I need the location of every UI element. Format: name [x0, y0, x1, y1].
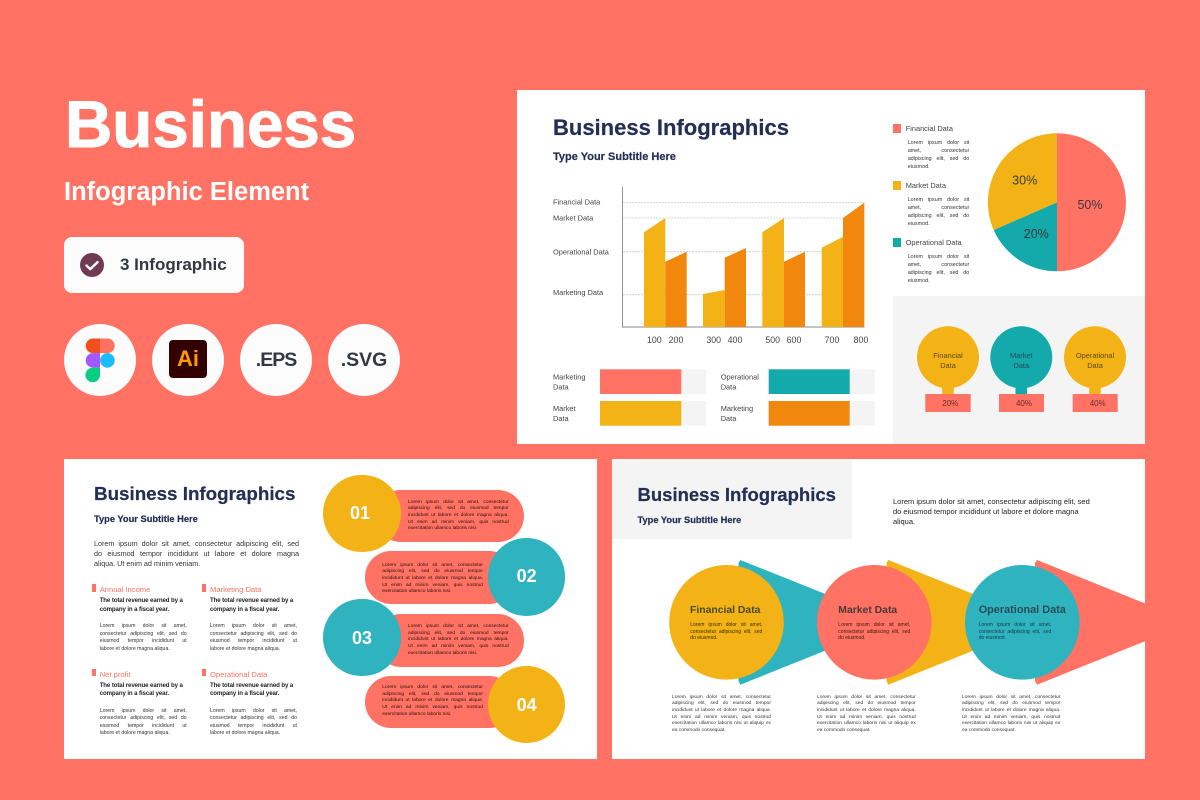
intro text: Lorem ipsum dolor sit amet, consectetur adipiscing elit, sed	[94, 539, 299, 548]
item: marketing data: labore et dolore magna aliqua.	[210, 646, 280, 652]
item: annual income: Annual Income	[100, 585, 150, 594]
text column 2: adipiscing elit, sed do eiusmod tempor	[817, 701, 916, 706]
step 04: exercitation ullamco laboris nisi.	[382, 712, 451, 717]
text column 3: Lorem ipsum dolor sit amet, consectetur	[962, 695, 1060, 700]
icon: Figma	[64, 324, 136, 396]
intro text: Lorem ipsum dolor sit amet, consectetur adipiscing elit, sed	[893, 497, 1090, 506]
text column 1: adipiscing elit, sed do eiusmod tempor	[672, 701, 771, 706]
progress bars: Data	[553, 382, 570, 391]
node: operational data	[979, 604, 1066, 641]
step 03: Lorem ipsum dolor sit amet, consectetur	[408, 624, 509, 629]
step 03: Ut enim ad minim veniam, quis nostrud	[408, 644, 509, 649]
item: net profit: labore et dolore magna aliqua.	[100, 730, 170, 736]
badge: 3 Infographic: 3 Infographic	[120, 255, 227, 274]
subtitle: Infographic Element	[64, 178, 309, 206]
item: marketing data: Marketing Data	[210, 585, 262, 594]
intro text: do eiusmod tempor incididunt ut labore et dolore magna	[893, 507, 1079, 516]
pie chart: 20%	[1024, 227, 1049, 241]
text column 2: Ut enim ad minim veniam, quis nostrud	[817, 715, 916, 720]
panel: process	[612, 459, 1145, 759]
step 02	[365, 538, 565, 616]
item: annual income: eiusmod tempor incididunt ut	[100, 638, 187, 644]
step 04	[365, 666, 565, 743]
text column 1: Ut enim ad minim veniam, quis nostrud	[672, 715, 771, 720]
panel: pin statistics	[893, 296, 1145, 444]
item: marketing data: consectetur adipiscing elit, sed do	[210, 630, 297, 636]
panel: pin statistics: Market	[1010, 351, 1033, 360]
text column 3: exercitation ullamco laboris nisi ut aliquip ex	[962, 721, 1060, 726]
item: operational data: eiusmod tempor incididunt ut	[210, 723, 297, 729]
icon: SVG	[328, 324, 400, 396]
panel: pin statistics: Data	[940, 361, 957, 370]
panel: pin statistics: 40%	[1090, 399, 1106, 408]
intro text: do eiusmod tempor incididunt ut labore et dolore magna	[94, 549, 299, 558]
progress bars: Data	[721, 414, 737, 423]
step 03: exercitation ullamco laboris nisi.	[408, 651, 477, 656]
step 03: incididunt ut labore et dolore magna aliqua.	[408, 637, 509, 642]
legend	[893, 124, 970, 284]
heading: Business Infographics	[638, 484, 836, 505]
icon: SVG: .SVG	[341, 349, 387, 371]
node: market data	[838, 605, 910, 641]
column chart: 300	[706, 335, 721, 345]
item: net profit: company in a fiscal year.	[100, 690, 169, 697]
text column 2	[817, 694, 916, 733]
column chart: Marketing Data	[553, 288, 604, 297]
text column 2: exercitation ullamco laboris nisi ut aliquip ex	[817, 721, 916, 726]
legend: Operational Data	[906, 238, 962, 247]
item: operational data: The total revenue earned by a	[210, 682, 293, 689]
legend: eiusmod.	[908, 278, 930, 284]
legend: adipiscing elit, sed do	[908, 213, 969, 219]
title: Business	[65, 88, 356, 161]
item: annual income: The total revenue earned by a	[100, 597, 183, 604]
legend: eiusmod.	[908, 164, 930, 170]
legend: eiusmod.	[908, 221, 930, 227]
item: annual income: consectetur adipiscing elit, sed do	[100, 630, 187, 636]
step 02: 02	[517, 566, 537, 586]
text column 3: ea commodo consequat.	[962, 728, 1016, 733]
intro text: aliqua. Ut enim ad minim veniam.	[94, 559, 200, 568]
intro text: aliqua.	[893, 517, 915, 526]
item: net profit: Lorem ipsum dolor sit amet,	[100, 708, 187, 714]
step 01: 01	[350, 503, 370, 523]
item: marketing data: company in a fiscal year.	[210, 606, 279, 613]
item: operational data: consectetur adipiscing elit, sed do	[210, 715, 297, 721]
step 02: Ut enim ad minim veniam, quis nostrud	[382, 583, 483, 588]
progress bars: Operational	[721, 372, 759, 381]
heading: Business Infographics	[553, 115, 789, 140]
step 01	[323, 475, 524, 552]
subtitle: Type Your Subtitle Here	[94, 514, 198, 524]
column chart: 500	[765, 335, 780, 345]
badge: 3 Infographic	[64, 237, 244, 293]
item: net profit: consectetur adipiscing elit, sed do	[100, 715, 187, 721]
legend: Lorem ipsum dolor sit	[908, 140, 969, 146]
subtitle: Type Your Subtitle Here	[553, 151, 676, 163]
icon: EPS	[240, 324, 312, 396]
header block: Type Your Subtitle Here	[638, 515, 741, 525]
text column 2: incididunt ut labore et dolore magna aliqua.	[817, 708, 916, 713]
text column 1: Lorem ipsum dolor sit amet, consectetur	[672, 695, 771, 700]
item: marketing data: eiusmod tempor incididunt ut	[210, 638, 297, 644]
progress bars: Data	[553, 414, 570, 423]
node: financial data: do eiusmod.	[690, 635, 718, 641]
step 03	[323, 599, 524, 676]
text column 1: incididunt ut labore et dolore magna aliqua.	[672, 708, 771, 713]
step 04: adipiscing elit, sed do eiusmod tempor	[382, 692, 483, 697]
item: net profit: The total revenue earned by a	[100, 682, 183, 689]
node: operational data: Lorem ipsum dolor sit amet,	[979, 622, 1051, 628]
step 01: exercitation ullamco laboris nisi.	[408, 526, 477, 531]
step 01: Ut enim ad minim veniam, quis nostrud	[408, 520, 509, 525]
progress bars: Data	[721, 382, 737, 391]
step 01: adipiscing elit, sed do eiusmod tempor	[408, 506, 509, 511]
text column 1	[672, 694, 771, 733]
node: financial data: Financial Data	[690, 605, 760, 616]
hero: title and format badges	[64, 88, 400, 396]
node: market data: consectetur adipiscing elit, sed	[838, 629, 910, 635]
legend: amet, consectetur	[908, 262, 969, 268]
step 04: incididunt ut labore et dolore magna aliqua.	[382, 698, 483, 703]
legend: adipiscing elit, sed do	[908, 270, 969, 276]
progress bars: Market	[553, 404, 576, 413]
node: market data: do eiusmod.	[838, 635, 866, 641]
panel: pin statistics: Financial	[933, 351, 963, 360]
column chart: 800	[854, 335, 868, 345]
icon: Adobe Illustrator	[152, 324, 224, 396]
text column 3: adipiscing elit, sed do eiusmod tempor	[962, 701, 1060, 706]
item: annual income: labore et dolore magna aliqua.	[100, 646, 170, 652]
node: financial data: consectetur adipiscing elit, sed	[690, 629, 762, 635]
text column 3: Ut enim ad minim veniam, quis nostrud	[962, 715, 1060, 720]
progress bars: Marketing	[553, 372, 585, 381]
step 01: Lorem ipsum dolor sit amet, consectetur	[408, 500, 509, 505]
pie chart: 50%	[1077, 198, 1103, 212]
item: operational data: Lorem ipsum dolor sit amet,	[210, 708, 297, 714]
panel: pin statistics: Operational	[1076, 351, 1114, 360]
column chart: Financial Data	[553, 198, 601, 207]
heading: Business Infographics	[94, 483, 295, 504]
node: market data: Lorem ipsum dolor sit amet,	[838, 622, 910, 628]
legend: amet, consectetur	[908, 148, 969, 154]
node: financial data	[690, 605, 762, 641]
item: operational data	[202, 669, 297, 736]
icon: EPS: .EPS	[256, 349, 296, 371]
step 02: adipiscing elit, sed do eiusmod tempor	[382, 569, 483, 574]
panel: charts	[517, 90, 1145, 444]
column chart: 400	[728, 335, 742, 345]
intro text	[893, 497, 1090, 526]
legend: Lorem ipsum dolor sit	[908, 197, 969, 203]
node: financial data: Lorem ipsum dolor sit amet,	[690, 622, 762, 628]
column chart: 700	[825, 335, 839, 345]
column chart: 600	[787, 335, 801, 345]
pie chart: 30%	[1012, 174, 1037, 188]
text column 2: ea commodo consequat.	[817, 728, 871, 733]
text column 2: Lorem ipsum dolor sit amet, consectetur	[817, 695, 916, 700]
icon: Adobe Illustrator: Ai	[177, 346, 199, 371]
item: net profit: eiusmod tempor incididunt ut	[100, 723, 187, 729]
text column 1: exercitation ullamco laboris nisi ut aliquip ex	[672, 721, 771, 726]
legend: amet, consectetur	[908, 205, 969, 211]
text column 3: incididunt ut labore et dolore magna aliqua.	[962, 708, 1060, 713]
item: operational data: company in a fiscal year.	[210, 690, 279, 697]
step 02: Lorem ipsum dolor sit amet, consectetur	[382, 563, 483, 568]
legend: adipiscing elit, sed do	[908, 156, 969, 162]
step 02: incididunt ut labore et dolore magna aliqua.	[382, 576, 483, 581]
panel: pin statistics: Data	[1013, 361, 1030, 370]
item: net profit	[92, 669, 187, 736]
item: annual income: Lorem ipsum dolor sit amet,	[100, 623, 187, 629]
column chart: 200	[669, 335, 683, 345]
column chart: Operational Data	[553, 247, 610, 256]
legend: Lorem ipsum dolor sit	[908, 254, 969, 260]
column chart: Market Data	[553, 214, 594, 223]
item: annual income: company in a fiscal year.	[100, 606, 169, 613]
item: marketing data: Lorem ipsum dolor sit amet,	[210, 623, 297, 629]
text column 1: ea commodo consequat.	[672, 728, 726, 733]
step 02: exercitation ullamco laboris nisi.	[382, 589, 451, 594]
progress bars: Marketing	[721, 404, 753, 413]
panel: pin statistics: Data	[1087, 361, 1104, 370]
node: operational data: consectetur adipiscing elit, sed	[979, 629, 1051, 635]
node: market data: Market Data	[838, 605, 897, 616]
node: operational data: do eiusmod.	[979, 635, 1006, 641]
panel: pin statistics: 20%	[942, 399, 958, 408]
item: net profit: Net profit	[100, 670, 130, 679]
intro text	[94, 539, 299, 568]
item: operational data: labore et dolore magna aliqua.	[210, 730, 280, 736]
text column 3	[962, 694, 1060, 733]
step 03: adipiscing elit, sed do eiusmod tempor	[408, 631, 509, 636]
node: operational data: Operational Data	[979, 604, 1066, 616]
legend: Financial Data	[906, 124, 953, 133]
legend: Market Data	[906, 181, 946, 190]
step 01: incididunt ut labore et dolore magna aliqua.	[408, 513, 509, 518]
column chart: 100	[647, 335, 662, 345]
panel: list	[64, 459, 597, 759]
header block	[612, 459, 852, 539]
step 04: Lorem ipsum dolor sit amet, consectetur	[382, 685, 483, 690]
item: annual income	[92, 584, 187, 652]
item: marketing data	[202, 584, 297, 652]
step 03: 03	[352, 628, 372, 648]
step 04: Ut enim ad minim veniam, quis nostrud	[382, 705, 483, 710]
step 04: 04	[517, 695, 537, 715]
panel: pin statistics: 40%	[1016, 399, 1032, 408]
item: marketing data: The total revenue earned by a	[210, 597, 293, 604]
item: operational data: Operational Data	[210, 670, 267, 679]
